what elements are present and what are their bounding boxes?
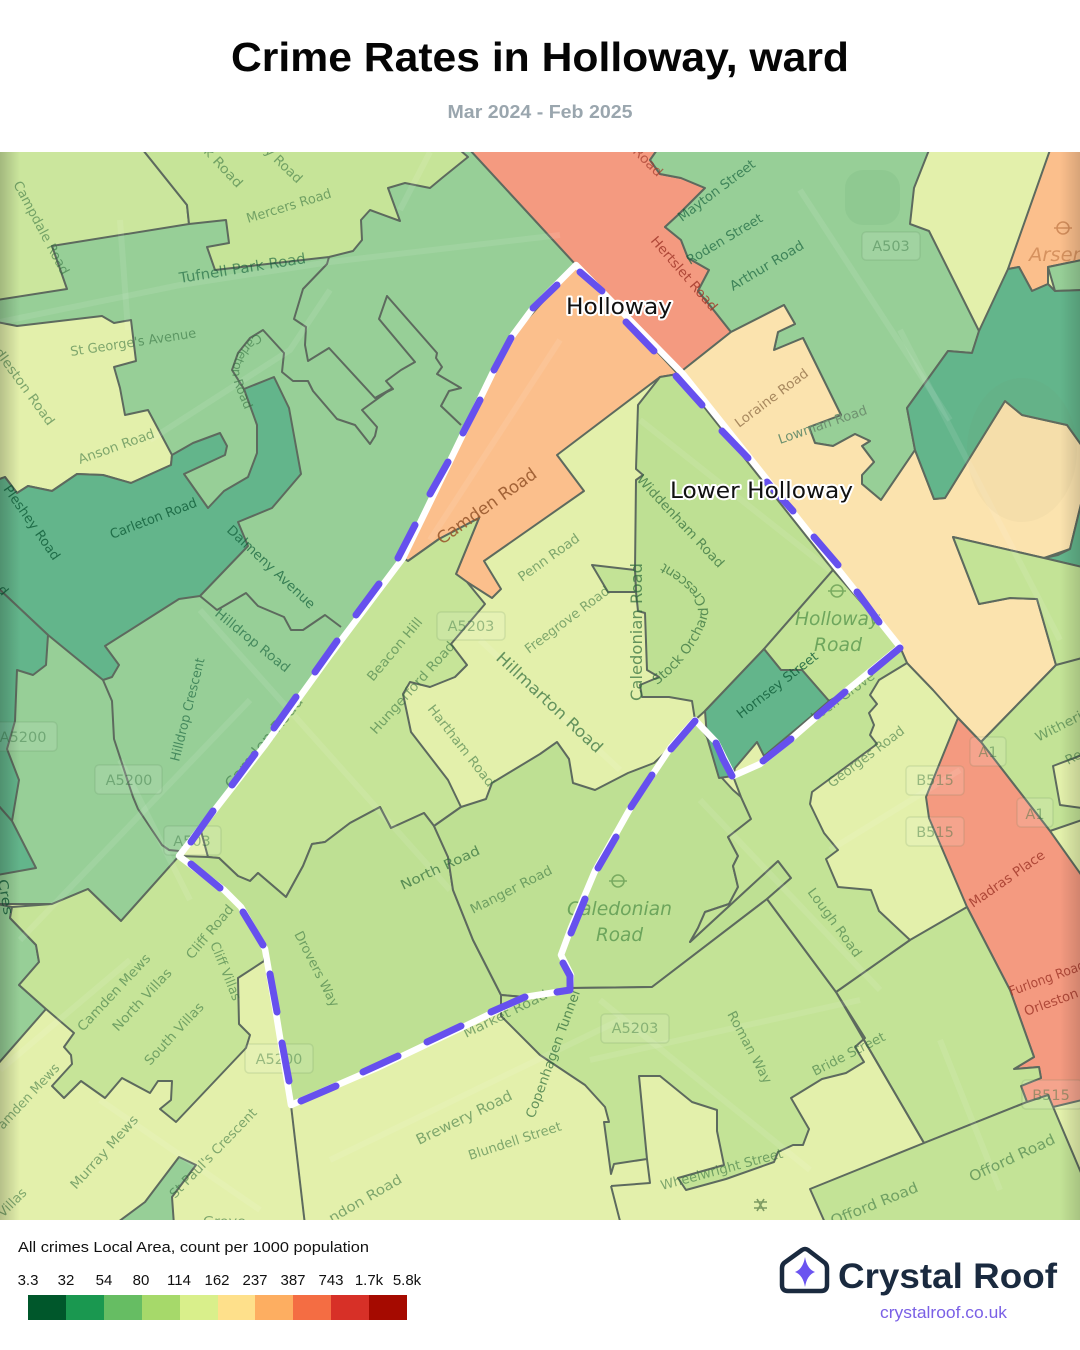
area: Lough Road light green: [690, 647, 910, 992]
road labels: Offord Road: [829, 1180, 921, 1230]
road labels: Camden Road: [433, 464, 541, 549]
road labels: Penn Road: [516, 531, 583, 585]
legend value labels: 743: [318, 1272, 344, 1289]
place label: Lower Holloway: Lower Holloway: [670, 478, 853, 504]
legend value labels: 32: [58, 1272, 74, 1289]
road labels: y Road: [261, 144, 305, 187]
legend value labels: 162: [204, 1272, 230, 1289]
place label: Holloway: Holloway: [566, 294, 672, 320]
road labels: Wheelwright Street: [659, 1147, 785, 1194]
road labels: Manger Road: [468, 863, 555, 918]
road labels: Carleton Road: [108, 496, 199, 543]
road labels: Offord Road: [967, 1132, 1058, 1186]
stadium ellipse: [967, 378, 1077, 522]
area: Beacon Hill light green: [179, 518, 485, 897]
map edge shading: [0, 152, 1080, 1220]
icon: house with star: [782, 1249, 827, 1291]
road shields: B515: [1032, 1088, 1070, 1104]
road labels: Loraine Road: [732, 366, 812, 431]
legend value labels: 5.8k: [393, 1272, 422, 1289]
road shields: A5200: [106, 773, 152, 789]
road labels: Murray Mews: [68, 1113, 142, 1193]
area: Hornsey Street dark green: [705, 649, 829, 778]
road shields: A5200: [0, 730, 46, 746]
area: Camden Mews light green: [10, 856, 265, 1122]
road labels: Hartham Road: [424, 702, 497, 790]
road labels: South Villas: [142, 1000, 208, 1069]
legend: [18, 1239, 422, 1320]
area: Holloway Road station green: [764, 570, 900, 701]
area: eastern red zone: [926, 718, 1080, 1107]
icon: underground roundel Holloway Road: [828, 585, 846, 597]
legend value labels: 54: [96, 1272, 112, 1289]
park patch: [845, 170, 900, 225]
road labels: Hilldrop Crescent: [168, 656, 209, 763]
road labels: Grove: [203, 1215, 246, 1230]
road shields: A5200: [256, 1052, 302, 1068]
road labels: Hertslet Road: [647, 234, 720, 315]
area: Offord Road: [810, 1095, 1080, 1225]
road labels: Stock Orchard Crescent: [652, 563, 708, 684]
legend value labels: 3.3: [18, 1272, 38, 1289]
road labels: Market Road: [461, 988, 550, 1042]
station label: Holloway Road: Holloway: [795, 608, 881, 630]
legend value labels: [18, 1272, 422, 1289]
road shields: A1: [978, 745, 998, 761]
road labels: Arthur Road: [727, 238, 807, 294]
area: south-west mid green: [0, 904, 46, 1065]
ward boundary: Holloway: [179, 265, 900, 1105]
area: small mid green patch: [1048, 260, 1080, 291]
road labels: North Villas: [110, 966, 176, 1035]
area: Furlong Road green: [836, 907, 1041, 1143]
logo: Crystal Roof: [782, 1249, 1057, 1322]
road labels: Lowman Road: [776, 403, 869, 448]
website: crystalroof.co.uk: [880, 1304, 1008, 1322]
road labels: Cliff Villas: [206, 940, 243, 1003]
area: Camden Road orange: [403, 265, 678, 598]
road labels: Copenhagen Tunnel: [524, 988, 584, 1120]
road labels: Georges Road: [825, 724, 908, 791]
area: Freegrove patch: [592, 565, 636, 592]
legend value labels: 387: [280, 1272, 306, 1289]
road labels: Mayton Street: [675, 157, 759, 225]
legend title: All crimes Local Area, count per 1000 population: [18, 1239, 369, 1256]
area: Mercers Road: [143, 150, 468, 270]
area: Lower Holloway cream: [678, 305, 1080, 742]
road labels: Cliff Road: [184, 902, 237, 963]
area: north red zone: [470, 150, 731, 374]
road shields: A5203: [448, 619, 494, 635]
road labels: Hilldrop Road: [211, 606, 292, 676]
road labels: Campdale Road: [9, 179, 72, 278]
road shields: B515: [916, 825, 954, 841]
road labels: St Paul's Crescent: [167, 1106, 261, 1202]
road labels: Anson Road: [76, 427, 157, 468]
area: Drovers Way light green: [179, 807, 525, 1105]
station label: Caledonian Road: Road: [596, 924, 644, 946]
area: Anson Road: [0, 316, 172, 493]
area: far-west dark triangle: [0, 804, 36, 875]
station label: Holloway Road: [795, 608, 881, 656]
wordmark: Crystal Roof: [838, 1257, 1057, 1296]
road labels: Tufnell Park Road: [177, 251, 307, 287]
road labels: Camden Mews: [75, 951, 154, 1035]
road labels: Beacon Hill: [365, 615, 426, 685]
icon: underground roundel Caledonian Road: [609, 875, 627, 887]
road labels: Blundell Street: [467, 1120, 563, 1164]
area: stadium dark green: [907, 267, 1080, 567]
area: Caledonian Road light green: [561, 720, 791, 988]
area: St Paul's mid green patch: [119, 1156, 197, 1220]
road shields: A5203: [612, 1021, 658, 1037]
area: east light green: [953, 537, 1080, 665]
road labels: Freegrove Road: [522, 584, 613, 657]
legend colour scale: [28, 1295, 407, 1320]
area: North Road light green: [434, 742, 671, 997]
road labels: Road: [629, 144, 665, 180]
road labels: Hornsey Street: [734, 649, 821, 722]
icon: underground roundel Arsenal: [1054, 222, 1072, 234]
station label: Holloway Road: Road: [814, 634, 863, 656]
road labels: Drovers Way: [290, 929, 342, 1010]
area: inner boundaries of mid green zone: [103, 257, 461, 851]
road labels: Mercers Road: [245, 187, 333, 227]
road labels: Carleton Road: [232, 335, 262, 409]
title: Crime Rates in Holloway, ward: [231, 34, 849, 80]
road labels: Roden Street: [684, 211, 766, 268]
road labels: Caledonian Road: [627, 563, 646, 701]
area: north-west mid green zone: [0, 150, 576, 921]
area: north-east mid green: [650, 150, 979, 500]
legend value labels: 1.7k: [355, 1272, 384, 1289]
road labels: North Road: [398, 844, 483, 894]
road labels: Roman Way: [723, 1009, 774, 1087]
icon: rail station: [754, 1199, 767, 1211]
road shields: [0, 232, 1080, 1109]
area: far-west dark green: [0, 587, 48, 821]
road labels: St George's Avenue: [69, 326, 197, 360]
road labels: Bride Street: [810, 1030, 888, 1080]
area: Campdale Road: [0, 150, 189, 300]
legend value labels: 80: [133, 1272, 149, 1289]
area: Roman Way light green: [501, 899, 865, 1190]
road labels: Hungerford Road: [368, 639, 459, 738]
road labels: k Road: [200, 144, 245, 191]
road labels: Madras Place: [967, 848, 1048, 911]
road labels: Hillmarton Road: [492, 648, 607, 757]
road labels: Pleshey Road: [0, 483, 62, 563]
faint street network: [0, 152, 1060, 1210]
station label: Caledonian Road: Caledonian: [567, 898, 672, 920]
road shields: A1: [1025, 807, 1045, 823]
area: Carleton Road dark green: [0, 377, 301, 680]
subtitle: date range: Mar 2024 - Feb 2025: [448, 101, 632, 122]
road labels: Camden Road: [221, 693, 307, 793]
road shields: A503: [872, 239, 910, 255]
road labels: Dalmeny Avenue: [223, 523, 318, 612]
road labels: Lough Road: [804, 886, 864, 961]
road shields: A503: [173, 834, 211, 850]
road labels: Widdenham Road: [633, 472, 727, 571]
area: Witherington Road: [981, 658, 1080, 831]
legend value labels: 237: [242, 1272, 268, 1289]
road labels: Loch Grove: [809, 669, 878, 725]
area: Widdenham Road light green: [635, 374, 833, 720]
station label: Caledonian Road: [567, 898, 672, 946]
area: remaining boundary lines: [291, 992, 924, 1225]
road labels: ndon Road: [326, 1172, 405, 1226]
legend value labels: 114: [167, 1272, 191, 1289]
road labels: Brewery Road: [414, 1088, 515, 1149]
area: Arsenal orange: [1008, 150, 1080, 291]
road shields: B515: [916, 773, 954, 789]
